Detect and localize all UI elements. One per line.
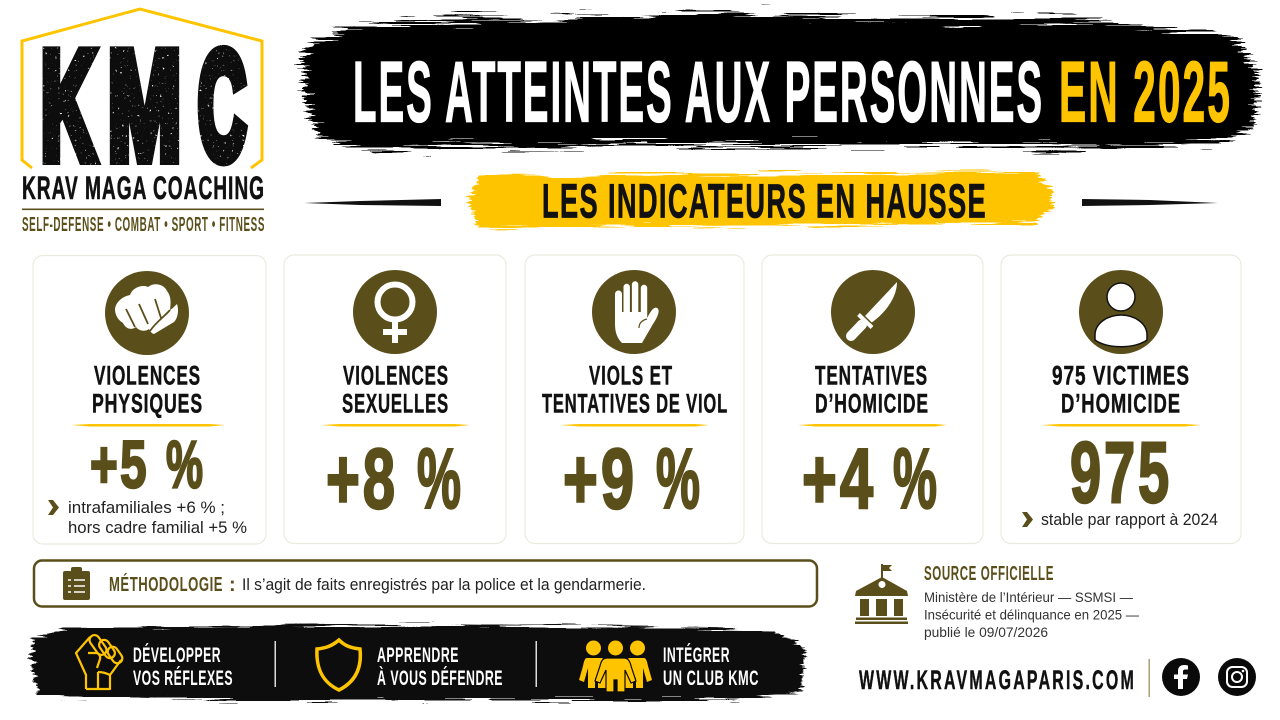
- detail note: [48, 499, 247, 537]
- yellow rule: [71, 424, 225, 426]
- panel: violences physiques: [33, 256, 266, 544]
- source text: Ministère de l’Intérieur — SSMSI —: [924, 589, 1133, 605]
- icon: three people: [579, 640, 652, 692]
- title brush stroke: [304, 14, 1258, 149]
- panel: victimes d'homicide: D’HOMICIDE: [1061, 388, 1181, 418]
- banner brush stroke: [32, 625, 805, 700]
- yellow rule: [560, 424, 709, 426]
- title banner: [304, 14, 1258, 149]
- logo frame: [22, 9, 262, 168]
- icon: instagram: [1218, 658, 1256, 696]
- label: apprendre: APPRENDRE: [377, 644, 459, 667]
- panel: violences sexuelles: [284, 255, 506, 544]
- value: +4: [802, 432, 876, 527]
- source text: publié le 09/07/2026: [924, 624, 1048, 640]
- value: 975: [1070, 425, 1172, 521]
- source block: [855, 563, 1139, 640]
- box outline: [34, 560, 817, 606]
- icon: person: [1079, 270, 1163, 354]
- card background: [33, 256, 266, 544]
- icon: clipboard: [63, 567, 90, 600]
- logo letters: M: [108, 21, 181, 191]
- icon: raised hand: [592, 270, 676, 354]
- yellow rule: [321, 424, 470, 426]
- value: %: [166, 428, 203, 502]
- text: SELF-DEFENSE • COMBAT • SPORT • FITNESS: [22, 214, 265, 236]
- panel: viols et tentatives de viol: [525, 255, 744, 544]
- panel: tentatives d'homicide: [762, 255, 983, 544]
- detail note: intrafamiliales +6 % ;: [68, 499, 225, 517]
- divider: [274, 641, 276, 687]
- subtitle banner: [304, 172, 1218, 228]
- value: %: [893, 432, 937, 527]
- subtitle left dash: [304, 199, 441, 206]
- methodology text: Il s’agit de faits enregistrés par la police et la gendarmerie.: [242, 575, 646, 594]
- logo: KMC: [22, 9, 265, 236]
- subtitle brush stroke: [468, 172, 1052, 227]
- value: +9: [563, 432, 637, 527]
- panel: viols et tentatives de viol: TENTATIVES DE VIOL: [542, 388, 728, 418]
- label: apprendre: À VOUS DÉFENDRE: [377, 667, 503, 690]
- yellow rule: [798, 424, 947, 426]
- card background: [1001, 255, 1241, 544]
- logo letters: K: [41, 21, 95, 191]
- icon: government building: [855, 564, 908, 624]
- card heading: VIOLENCES: [94, 360, 201, 390]
- card heading: VIOLS ET: [589, 360, 673, 390]
- panel: violences physiques: PHYSIQUES: [92, 388, 203, 418]
- source heading: SOURCE OFFICIELLE: [924, 563, 1054, 585]
- icon: venus: [353, 270, 437, 354]
- value: +8: [326, 432, 398, 527]
- icon: facebook: [1162, 658, 1200, 696]
- divider: [536, 641, 537, 687]
- card heading: VIOLENCES: [343, 360, 449, 390]
- panel: victimes d'homicide: [1001, 255, 1241, 544]
- icon: fist: [105, 271, 189, 355]
- subtitle right dash: [1082, 199, 1218, 206]
- card background: [284, 255, 506, 544]
- icon: shield: [317, 640, 360, 690]
- source text: Insécurité et délinquance en 2025 —: [924, 606, 1139, 622]
- detail note: stable par rapport à 2024: [1041, 511, 1218, 529]
- logo rule: [22, 208, 264, 210]
- methodology label: MÉTHODOLOGIE: [109, 573, 223, 596]
- value: %: [417, 432, 461, 527]
- card heading: 975 VICTIMES: [1052, 360, 1190, 390]
- label: intégrer: INTÉGRER: [663, 644, 730, 667]
- yellow rule: [1041, 424, 1201, 426]
- methodology box: [34, 560, 817, 606]
- card heading: TENTATIVES: [815, 360, 928, 390]
- card background: [525, 255, 744, 544]
- footer divider: [1148, 659, 1150, 697]
- value: %: [656, 432, 700, 527]
- label: développer: DÉVELOPPER: [133, 644, 221, 667]
- call to action banner: [32, 625, 805, 700]
- detail note: hors cadre familial +5 %: [68, 519, 247, 537]
- icon: knife: [831, 270, 915, 354]
- label: intégrer: UN CLUB KMC: [663, 667, 759, 690]
- value: +5: [90, 428, 149, 502]
- card background: [762, 255, 983, 544]
- label: développer: VOS RÉFLEXES: [133, 667, 233, 690]
- methodology label: :: [229, 574, 236, 596]
- logo name: KRAV MAGA COACHING: [22, 170, 265, 206]
- panel: tentatives d'homicide: D’HOMICIDE: [815, 388, 929, 418]
- panel: violences sexuelles: SEXUELLES: [342, 388, 449, 418]
- icon: raised fist: [76, 633, 124, 689]
- logo: KMC: C: [198, 21, 246, 191]
